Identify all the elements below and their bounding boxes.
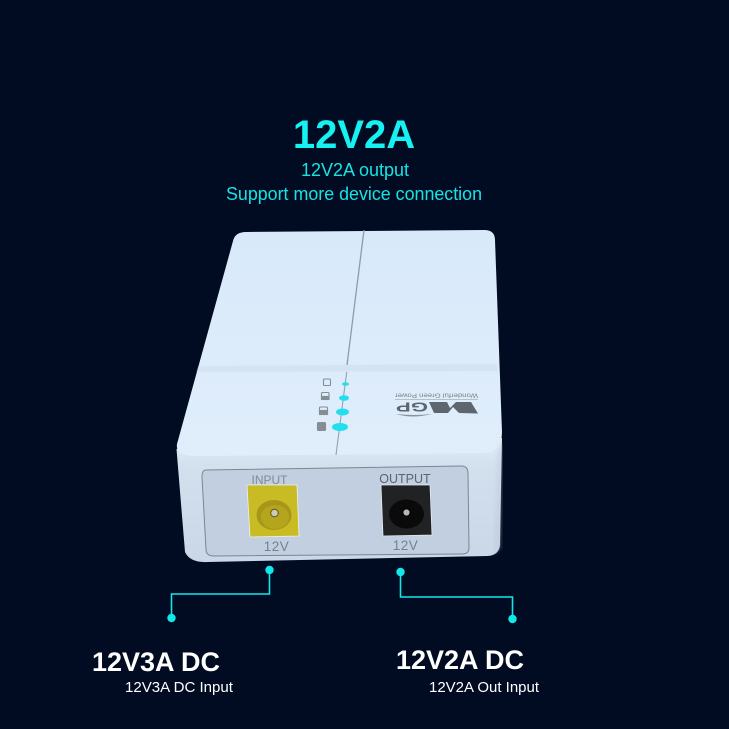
callout: input: 12V3A DC Input — [125, 679, 234, 696]
battery level icons — [318, 379, 330, 430]
12V label under output: 12V — [393, 538, 418, 553]
top face of device — [177, 230, 502, 456]
text block: output description — [226, 160, 482, 204]
callout: output: 12V2A Out Input — [429, 679, 540, 696]
LED indicators — [332, 382, 349, 431]
text block: output description: 12V2A output — [301, 160, 409, 180]
12V label under input: 12V — [264, 539, 289, 554]
top seam — [347, 230, 364, 365]
fold band — [197, 364, 498, 372]
OUTPUT label: OUTPUT — [379, 472, 431, 486]
callout: input — [92, 647, 234, 696]
callout: output — [396, 645, 540, 696]
heading: 12V2A: 12V2A — [293, 113, 415, 157]
connector: input callout — [167, 566, 274, 622]
product: mini DC UPS — [176, 230, 502, 562]
port panel — [202, 466, 469, 556]
WGP logo — [394, 392, 478, 416]
callout: output: 12V2A DC — [396, 645, 524, 675]
input port: yellow — [247, 485, 299, 537]
WGP logo: Wonderful Green Power — [394, 392, 478, 398]
connector: output callout — [396, 568, 517, 623]
WGP logo: GP — [395, 400, 428, 414]
callout: input: 12V3A DC — [92, 647, 220, 677]
right edge shading — [494, 440, 502, 554]
front face of device — [176, 438, 502, 562]
INPUT label: INPUT — [252, 473, 288, 487]
output port: black — [381, 485, 432, 536]
text block: output description: Support more device connection — [226, 184, 482, 204]
